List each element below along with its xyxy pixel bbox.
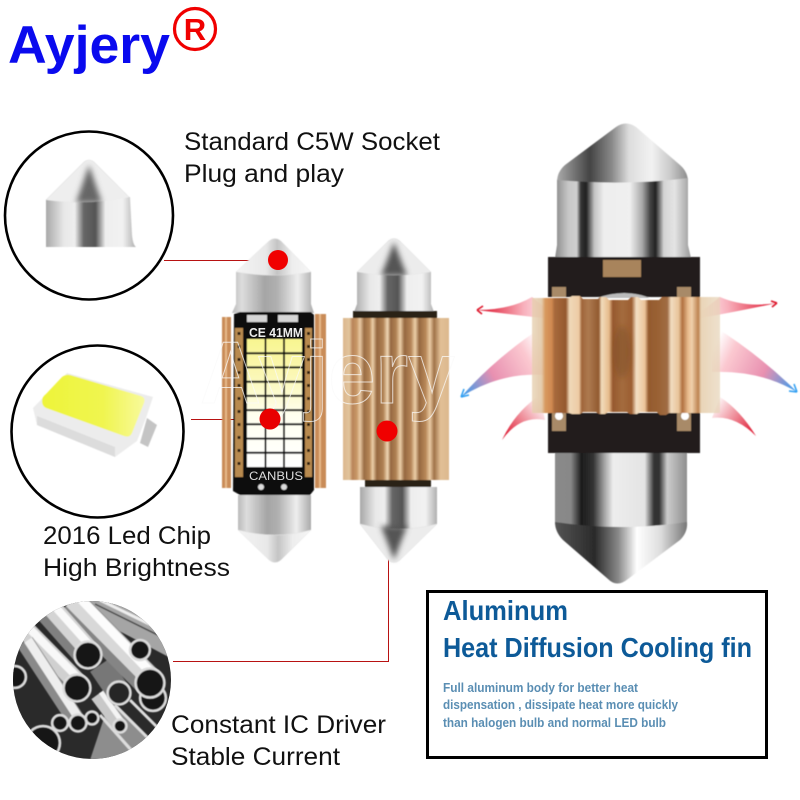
brand logo: Ayjery xyxy=(8,16,171,75)
leader line: LED chip xyxy=(191,418,262,420)
caption: IC driver: Constant IC Driver xyxy=(171,711,386,739)
caption: IC driver xyxy=(171,711,386,771)
box body text: dispensation , dissipate heat more quickly xyxy=(443,698,678,712)
bulb label: CANBUS: CANBUS xyxy=(249,469,303,483)
marker: socket xyxy=(268,250,288,270)
heat arrows: left xyxy=(461,297,560,440)
marker: LED chip xyxy=(260,408,280,430)
bulb: LED side xyxy=(222,238,326,562)
marker: cooling fin xyxy=(376,420,398,442)
bulb label: CE 41MM: CE 41MM xyxy=(249,326,303,340)
caption: socket xyxy=(184,128,440,188)
circle: socket tip detail xyxy=(5,132,173,300)
box heading xyxy=(443,595,752,663)
caption: socket: Plug and play xyxy=(184,160,345,188)
caption: socket: Standard C5W Socket xyxy=(184,128,440,156)
box heading: Heat Diffusion Cooling fin xyxy=(443,632,752,663)
enlarged bulb with cooling fins xyxy=(532,124,720,584)
heat arrows: right xyxy=(690,297,797,436)
leader line: cooling fin xyxy=(173,436,388,662)
leader line: socket xyxy=(164,260,270,262)
caption: LED chip: High Brightness xyxy=(43,554,230,582)
bulb: fin side xyxy=(343,238,449,562)
caption: LED chip xyxy=(43,522,230,582)
box heading: Aluminum xyxy=(443,595,568,626)
watermark: Ayjery xyxy=(200,323,455,422)
info box: aluminum cooling fin xyxy=(428,592,766,758)
circle: aluminum tubes photo xyxy=(13,601,171,759)
brand logo xyxy=(8,8,216,75)
caption: LED chip: 2016 Led Chip xyxy=(43,522,211,550)
caption: IC driver: Stable Current xyxy=(171,743,340,771)
box body text: than halogen bulb and normal LED bulb xyxy=(443,716,666,730)
box body text: Full aluminum body for better heat xyxy=(443,681,639,695)
circle: LED chip detail xyxy=(12,346,184,518)
brand logo: R xyxy=(184,12,206,47)
box body text xyxy=(443,681,678,730)
